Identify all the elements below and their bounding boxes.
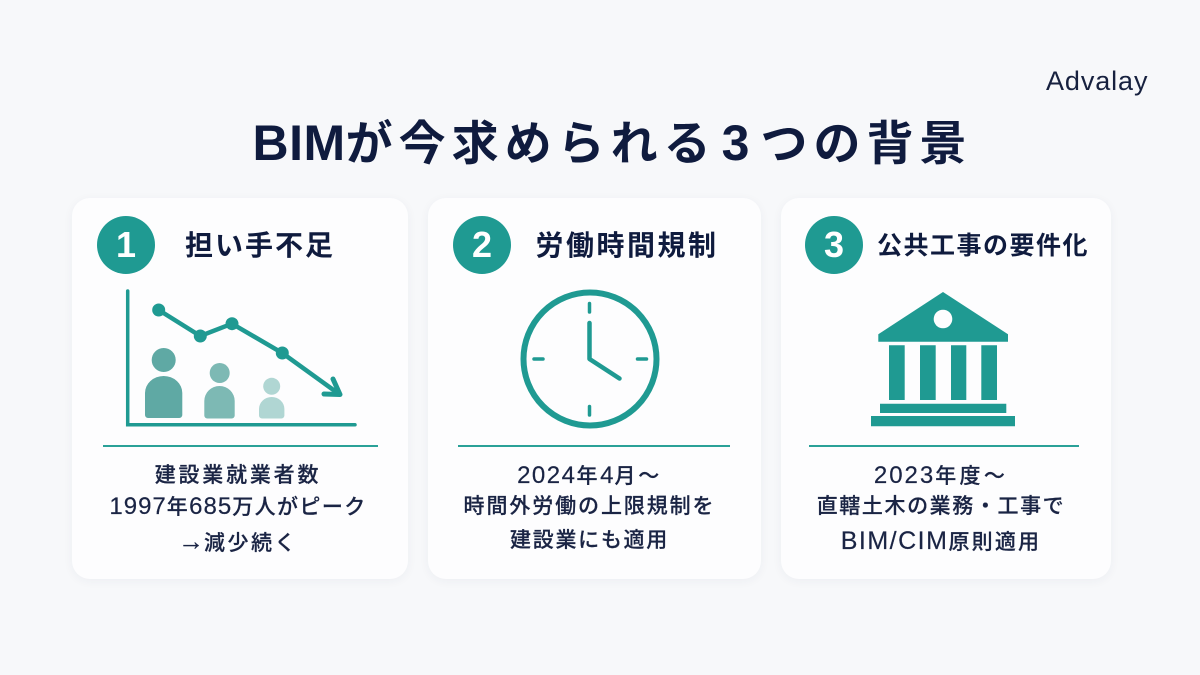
number badge 1: 1 bbox=[116, 224, 136, 265]
panel: 担い手不足: →減少続く bbox=[178, 526, 298, 556]
heading: 担い手不足: 担い手不足 bbox=[185, 230, 335, 261]
icon: clock bbox=[520, 290, 660, 428]
panel: 労働時間規制: 時間外労働の上限規制を bbox=[464, 495, 715, 518]
number badge 2: 2 bbox=[472, 224, 492, 265]
heading: 労働時間規制: 労働時間規制 bbox=[535, 230, 718, 261]
title: BIMが今求められる3つの背景 bbox=[253, 115, 972, 171]
panel: 労働時間規制: 建設業にも適用 bbox=[510, 529, 669, 552]
text block: workforce bbox=[109, 464, 367, 556]
panel: 担い手不足: 建設業就業者数 bbox=[155, 464, 321, 487]
chart axes bbox=[128, 291, 355, 425]
panel: 労働時間規制: 2024年4月～ bbox=[517, 462, 662, 489]
panel: 公共工事の要件化: BIM/CIM原則適用 bbox=[841, 527, 1041, 555]
icon: small person bbox=[259, 378, 284, 418]
logo: Advalay: Advalay bbox=[1046, 66, 1148, 96]
number badge 2 bbox=[453, 216, 511, 274]
panel: 公共工事の要件化 bbox=[781, 198, 1111, 579]
panel: 担い手不足: 1997年685万人がピーク bbox=[109, 493, 367, 520]
chart: declining workforce line with people bbox=[126, 289, 357, 426]
number badge 3: 3 bbox=[824, 224, 844, 265]
number badge 1 bbox=[97, 216, 155, 274]
panel: 担い手不足 bbox=[72, 198, 408, 579]
text block: regulation bbox=[464, 462, 715, 552]
text block: public works bbox=[817, 462, 1065, 555]
trend line with arrow bbox=[152, 304, 340, 394]
number badge 3 bbox=[805, 216, 863, 274]
panel: 公共工事の要件化: 2023年度～ bbox=[874, 462, 1008, 489]
icon: large person bbox=[145, 348, 182, 418]
heading: 公共工事の要件化: 公共工事の要件化 bbox=[877, 232, 1089, 260]
panel: 労働時間規制 bbox=[428, 198, 761, 579]
icon: public building bbox=[871, 292, 1015, 426]
icon: medium person bbox=[204, 363, 235, 418]
panel: 公共工事の要件化: 直轄土木の業務・工事で bbox=[817, 495, 1065, 518]
